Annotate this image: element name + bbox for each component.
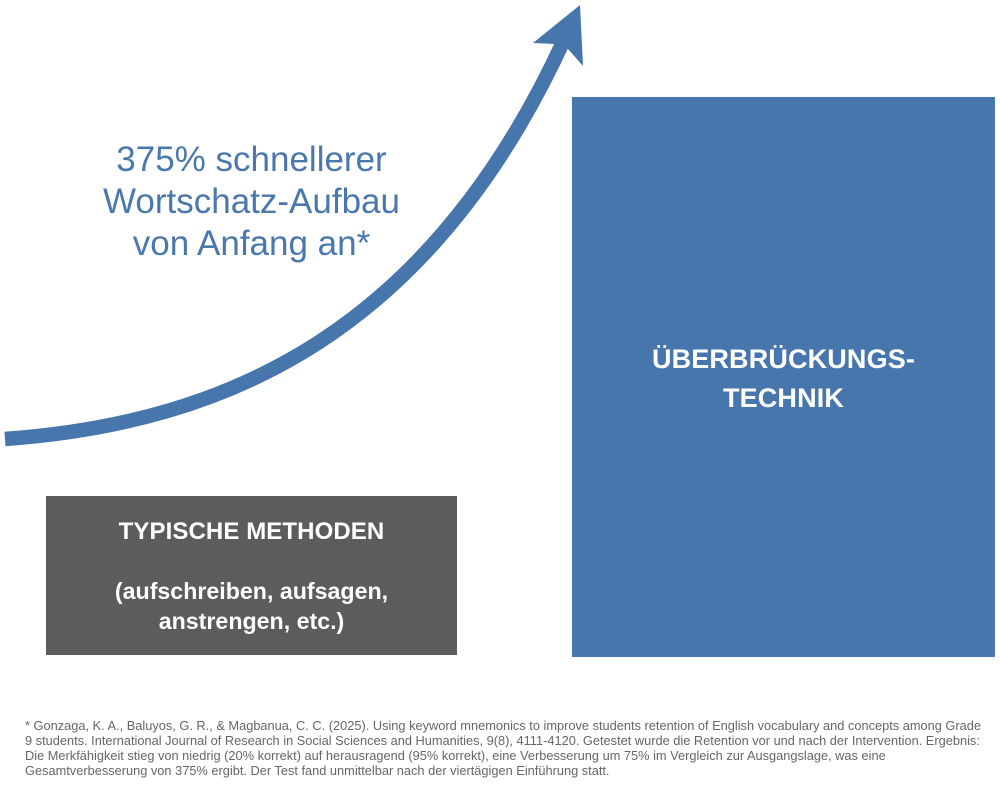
footnote: Die Merkfähigkeit stieg von niedrig (20% korrekt) auf herausragend (95% korrekt), eine Verbesserung um 75% im Vergleich zur Ausgangslage, was eine	[25, 748, 886, 763]
text: method examples: anstrengen, etc.)	[159, 608, 344, 634]
text: method examples: (aufschreiben, aufsagen,	[115, 578, 388, 604]
callout: 375% faster vocabulary: 375% schnellerer	[116, 140, 387, 178]
heading: bridging technique	[652, 344, 915, 413]
heading: bridging technique: TECHNIK	[723, 383, 844, 413]
callout: 375% faster vocabulary: von Anfang an*	[133, 224, 370, 262]
heading: typical methods: TYPISCHE METHODEN	[119, 518, 384, 545]
heading: bridging technique: ÜBERBRÜCKUNGS-	[652, 344, 915, 374]
footnote	[25, 718, 981, 778]
footnote: 9 students. International Journal of Research in Social Sciences and Humanities, 9(8), 4111-4120. Getestet wurde die Retention vor und nach der Intervention. Ergebnis:	[25, 733, 980, 748]
footnote: Gesamtverbesserung von 375% ergibt. Der Test fand unmittelbar nach der viertägigen Einführung statt.	[25, 763, 609, 778]
footnote: * Gonzaga, K. A., Baluyos, G. R., & Magbanua, C. C. (2025). Using keyword mnemonics to improve students retention of English vocabulary and concepts among Grade	[25, 718, 981, 733]
panel: bridging technique	[572, 97, 995, 657]
callout: 375% faster vocabulary: Wortschatz-Aufbau	[103, 182, 400, 220]
panel: typical methods	[46, 496, 457, 655]
text: method examples	[115, 578, 388, 634]
callout: 375% faster vocabulary	[103, 140, 400, 262]
